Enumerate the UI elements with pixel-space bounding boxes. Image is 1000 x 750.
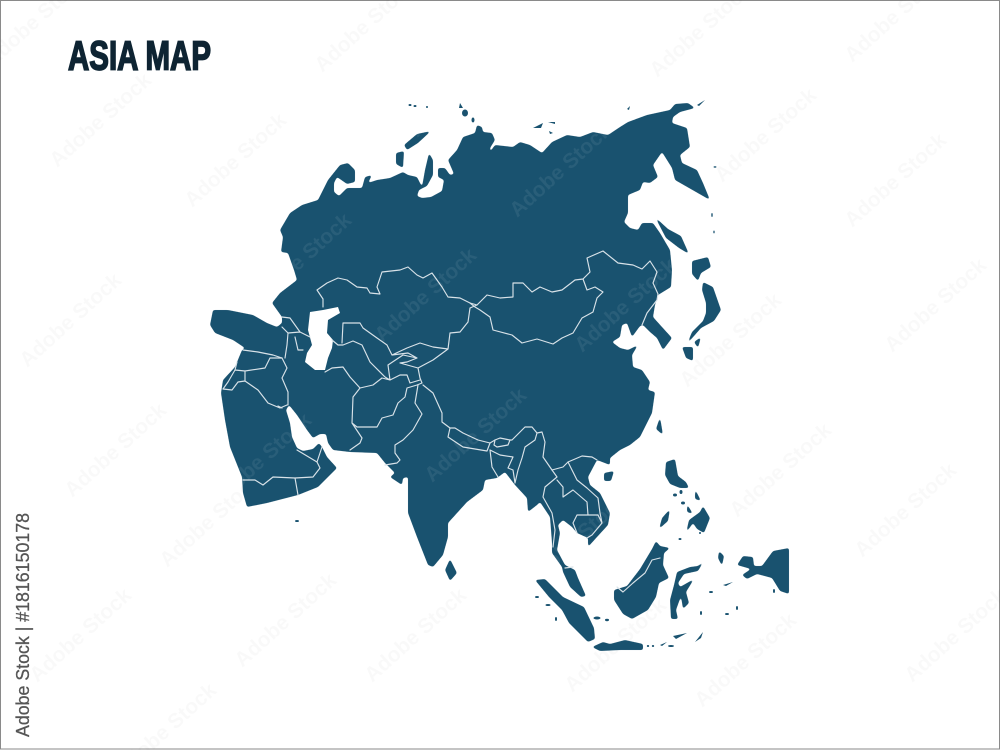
Caucasus and Turkey borders	[243, 317, 310, 358]
Sulawesi	[670, 561, 704, 619]
Novaya Zemlya	[404, 131, 431, 150]
Middle East borders	[223, 358, 288, 408]
watermark layer: Adobe Stock	[360, 583, 471, 687]
watermark layer: Adobe Stock	[230, 568, 341, 672]
Nepal and Bhutan borders	[448, 428, 510, 451]
watermark layer: Adobe Stock	[180, 108, 291, 212]
Borneo border	[617, 558, 660, 592]
Arabian Peninsula borders	[243, 447, 322, 495]
Kara Sea island	[396, 151, 404, 168]
map of Asia	[210, 100, 789, 651]
Japan	[682, 257, 721, 361]
watermark layer: Adobe Stock	[60, 398, 171, 502]
Java	[592, 640, 643, 651]
watermark layer: Adobe Stock	[880, 253, 991, 357]
watermarks over map: Adobe Stock	[570, 253, 681, 357]
Borneo	[614, 541, 670, 619]
title: ASIA MAP	[68, 32, 211, 78]
watermark layer: Adobe Stock	[155, 468, 266, 572]
watermark layer: Adobe Stock	[840, 128, 951, 232]
Caspian Sea	[305, 307, 340, 370]
watermark layer: Adobe Stock	[690, 608, 801, 712]
Bangladesh and Myanmar borders	[490, 433, 537, 483]
Hainan	[604, 471, 614, 481]
Taiwan	[656, 417, 663, 435]
watermarks over map: Adobe Stock	[520, 488, 631, 592]
Philippines	[659, 459, 710, 533]
Kazakhstan and Russia border	[317, 251, 658, 325]
Southeast Asia borders	[543, 462, 602, 568]
watermarks over map: Adobe Stock	[245, 208, 356, 312]
stock id caption: Adobe Stock | #1816150178	[13, 513, 33, 737]
Sri Lanka	[445, 559, 457, 581]
Sumatra	[535, 579, 595, 642]
Central Asia borders	[325, 305, 477, 388]
Sakhalin	[655, 217, 689, 254]
watermarks over map: Adobe Stock	[370, 243, 481, 347]
watermark layer: Adobe Stock	[850, 458, 961, 562]
watermark layer: Adobe Stock	[15, 268, 126, 372]
watermark layer: Adobe Stock	[710, 83, 821, 187]
country borders	[223, 251, 660, 592]
watermark layer: Adobe Stock	[725, 418, 836, 522]
watermarks over map: Adobe Stock	[205, 408, 316, 512]
watermarks over map: Adobe Stock	[420, 383, 531, 487]
landmasses with rounded coastlines	[210, 103, 789, 651]
watermarks over map: Adobe Stock	[505, 118, 616, 222]
watermark layer: Adobe Stock	[560, 593, 671, 697]
watermark layer: Adobe Stock	[675, 288, 786, 392]
New Guinea	[737, 548, 789, 594]
watermark layer: Adobe Stock	[45, 68, 156, 172]
watermark layer: Adobe Stock	[25, 583, 136, 687]
Mongolia border	[470, 279, 603, 344]
India and Pakistan border	[385, 385, 422, 465]
small islands	[295, 100, 775, 647]
watermarks over map: Adobe Stock	[405, 38, 516, 142]
Iran, Afghanistan and Pakistan borders	[350, 378, 422, 450]
watermarks over map	[205, 38, 681, 592]
northern Malay part of Halmahera	[718, 551, 724, 566]
China and South Asia border	[423, 385, 597, 470]
mainland Asia landmass	[210, 103, 710, 597]
